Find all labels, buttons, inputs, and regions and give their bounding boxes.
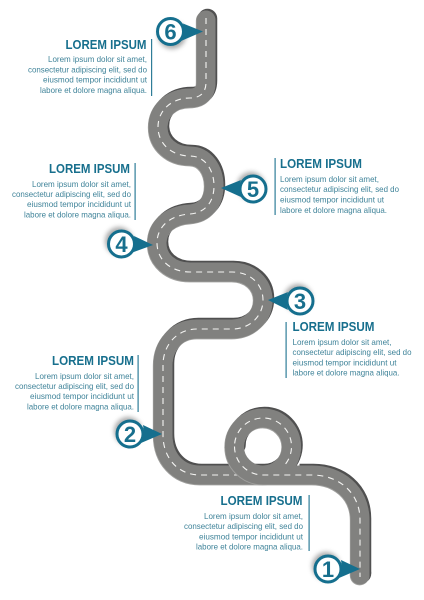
text block 2 [15, 353, 139, 412]
text block 1 [184, 493, 310, 552]
marker 3: 3 [294, 289, 306, 314]
marker 2 [114, 417, 162, 447]
text block 2: LOREM IPSUM [52, 353, 134, 368]
text block 5: consectetur adipiscing elit, sed do [280, 184, 399, 194]
text block 3: labore et dolore magna aliqua. [292, 368, 400, 378]
text block 6: eiusmod tempor incididunt ut [43, 74, 148, 84]
text block 5: eiusmod tempor incididunt ut [280, 194, 385, 204]
marker 2: 2 [124, 422, 136, 447]
text block 2: Lorem ipsum dolor sit amet, [35, 371, 134, 381]
text block 5 [274, 156, 399, 215]
marker 4: 4 [115, 232, 128, 257]
text block 1: consectetur adipiscing elit, sed do [184, 521, 303, 531]
text block 6: labore et dolore magna aliqua. [40, 85, 147, 95]
winding road [157, 18, 371, 585]
text block 5: labore et dolore magna aliqua. [280, 205, 387, 215]
text block 4: consectetur adipiscing elit, sed do [12, 189, 131, 199]
text block 2: consectetur adipiscing elit, sed do [15, 381, 134, 391]
text block 1: Lorem ipsum dolor sit amet, [204, 511, 303, 521]
marker 5: 5 [247, 177, 259, 202]
text block 6: consectetur adipiscing elit, sed do [28, 64, 147, 74]
marker 1: 1 [322, 557, 334, 582]
text block 3: LOREM IPSUM [292, 319, 374, 334]
marker 6 [158, 18, 203, 49]
text block 6 [28, 37, 152, 96]
text block 5: Lorem ipsum dolor sit amet, [280, 174, 379, 184]
text block 3: consectetur adipiscing elit, sed do [292, 347, 412, 357]
text block 1: eiusmod tempor incididunt ut [199, 532, 304, 542]
text block 6: LOREM IPSUM [66, 37, 146, 52]
text block 6: Lorem ipsum dolor sit amet, [48, 54, 147, 64]
text block 3: eiusmod tempor incididunt ut [292, 358, 397, 368]
marker 3 [268, 284, 313, 314]
marker 6: 6 [164, 20, 177, 44]
text block 1: LOREM IPSUM [220, 493, 302, 508]
text block 4: labore et dolore magna aliqua. [24, 210, 131, 220]
road overpass layer [234, 446, 371, 585]
marker 4 [105, 227, 153, 257]
text block 3 [286, 319, 412, 378]
text block 4: eiusmod tempor incididunt ut [27, 199, 132, 209]
marker 1 [312, 552, 360, 582]
text block 2: labore et dolore magna aliqua. [27, 402, 134, 412]
text block 4: Lorem ipsum dolor sit amet, [32, 179, 131, 189]
text block 1: labore et dolore magna aliqua. [196, 542, 303, 552]
text block 4 [12, 161, 136, 220]
marker 5 [221, 172, 266, 202]
text block 3: Lorem ipsum dolor sit amet, [292, 337, 392, 347]
text block 4: LOREM IPSUM [49, 161, 130, 176]
text block 2: eiusmod tempor incididunt ut [30, 391, 135, 401]
road base layer [157, 18, 293, 476]
text block 5: LOREM IPSUM [280, 156, 362, 171]
